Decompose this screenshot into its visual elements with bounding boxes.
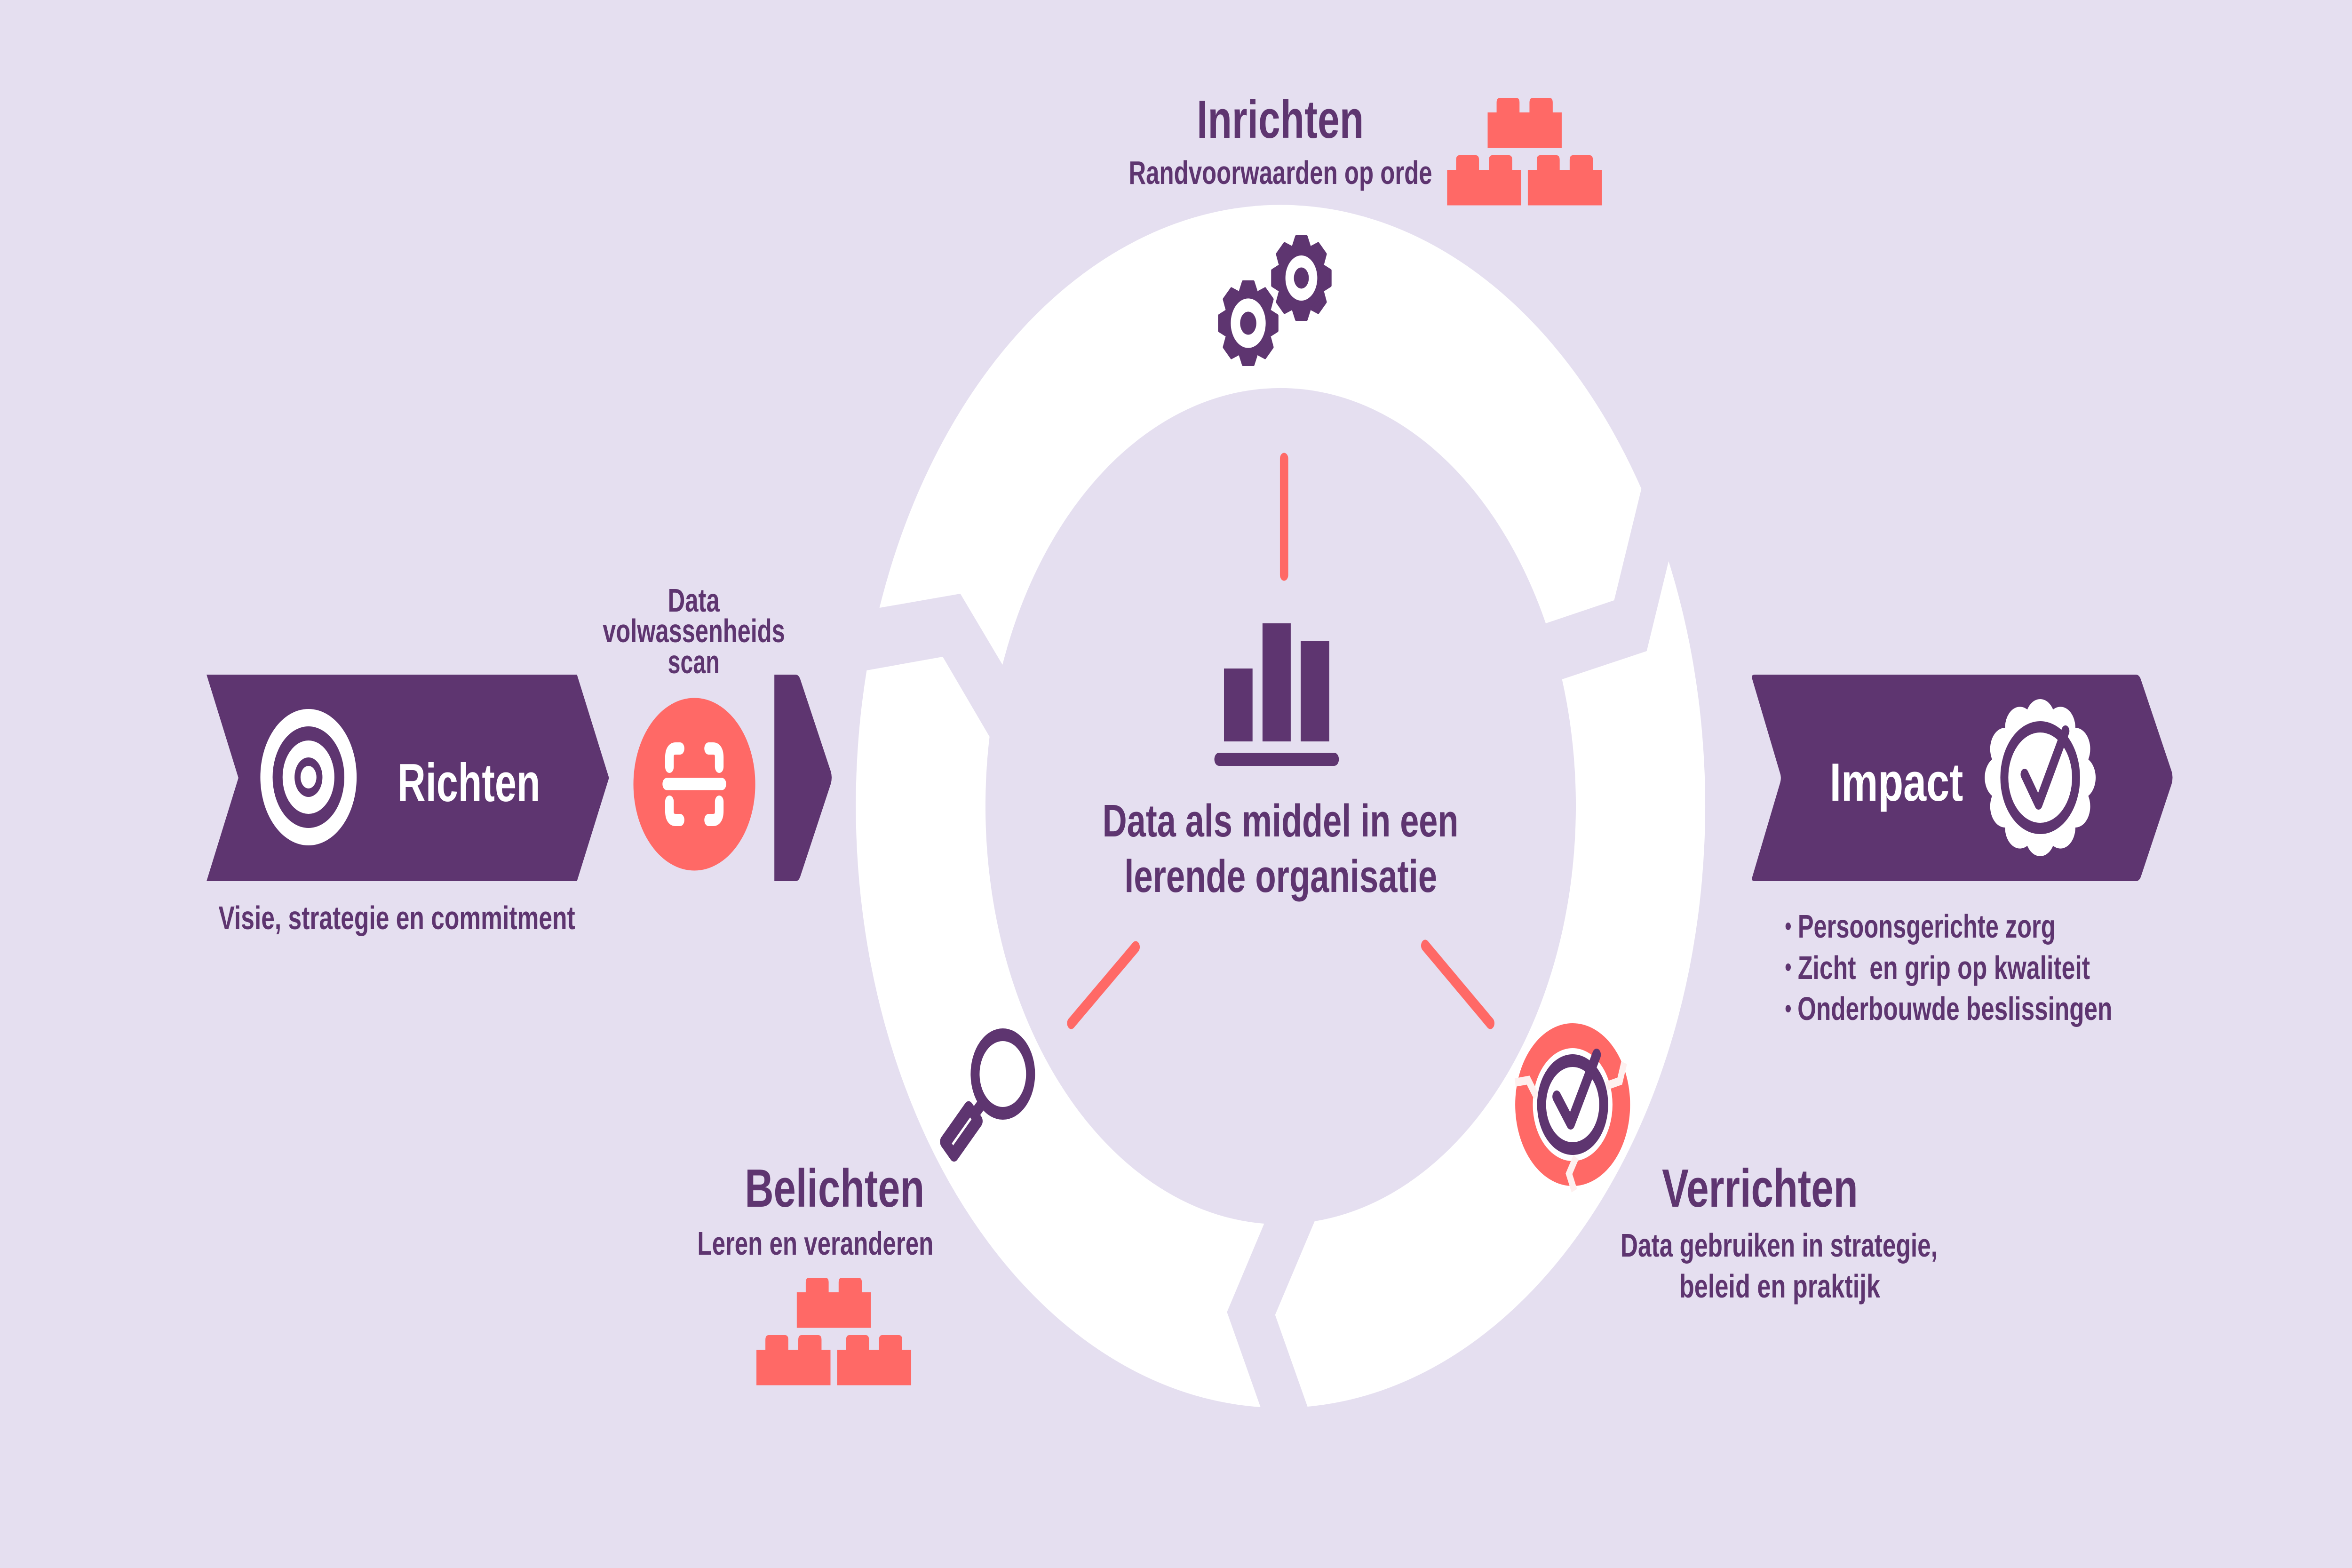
icon: gears	[1219, 237, 1331, 365]
heading: Impact: Impact	[1830, 752, 1963, 812]
text: Richten subtitle: Visie, strategie en commitment	[218, 899, 575, 936]
chevron: Richten	[207, 675, 609, 881]
panel: Inrichten	[1128, 89, 1432, 191]
icon: scan circle	[634, 698, 755, 870]
panel: Richten	[207, 675, 609, 881]
heading: Richten: Richten	[397, 753, 540, 812]
label: Data volwassenheids scan: scan	[668, 643, 720, 680]
list: Impact outcomes: Onderbouwde beslissingen	[1797, 990, 2112, 1027]
icon: bricks Inrichten	[1447, 98, 1602, 205]
heading: Inrichten: Inrichten	[1197, 89, 1364, 149]
text: Inrichten subtitle: Randvoorwaarden op orde	[1128, 154, 1432, 191]
icon: target	[260, 709, 357, 845]
text: Verrichten subtitle	[1621, 1226, 1938, 1305]
list: Impact outcomes: Persoonsgerichte zorg	[1798, 907, 2056, 945]
panel: Belichten	[697, 1158, 933, 1262]
line: top connector	[1278, 459, 1290, 575]
chart: center bars	[1215, 623, 1339, 766]
arrow: small chevron	[774, 675, 832, 881]
gear right	[1272, 237, 1331, 319]
title: center text: Data als middel in een	[1103, 795, 1458, 846]
icon: bricks Belichten	[756, 1278, 911, 1385]
list: Impact outcomes	[1786, 907, 2112, 1027]
line: right connector	[1425, 946, 1490, 1023]
icon: magnifier	[938, 1035, 1031, 1164]
line: left connector	[1071, 947, 1136, 1023]
panel: Impact	[1752, 675, 2172, 881]
icon: verrichten cycle check	[1515, 1036, 1624, 1191]
gear left	[1219, 282, 1278, 365]
text: Belichten subtitle: Leren en veranderen	[697, 1225, 933, 1262]
icon: badge check	[1985, 699, 2096, 856]
label: Data volwassenheids scan	[603, 581, 785, 680]
label: Data volwassenheids scan: Data	[668, 581, 720, 619]
ring segment: right	[1275, 561, 1705, 1407]
title: center text: lerende organisatie	[1124, 851, 1437, 902]
panel: Verrichten	[1621, 1158, 1938, 1305]
cycle ring	[856, 205, 1705, 1407]
title: center text	[1103, 795, 1458, 902]
text: Verrichten subtitle: Data gebruiken in strategie,	[1621, 1226, 1938, 1264]
ring segment: left	[856, 657, 1264, 1407]
heading: Verrichten: Verrichten	[1662, 1158, 1858, 1218]
list: Impact outcomes: Zicht en grip op kwaliteit	[1798, 949, 2090, 986]
heading: Belichten: Belichten	[745, 1158, 924, 1218]
chevron: Impact	[1752, 675, 2172, 881]
ring segment: top	[880, 205, 1641, 665]
text: Verrichten subtitle: beleid en praktijk	[1679, 1267, 1880, 1305]
label: Data volwassenheids scan: volwassenheids	[603, 612, 785, 649]
